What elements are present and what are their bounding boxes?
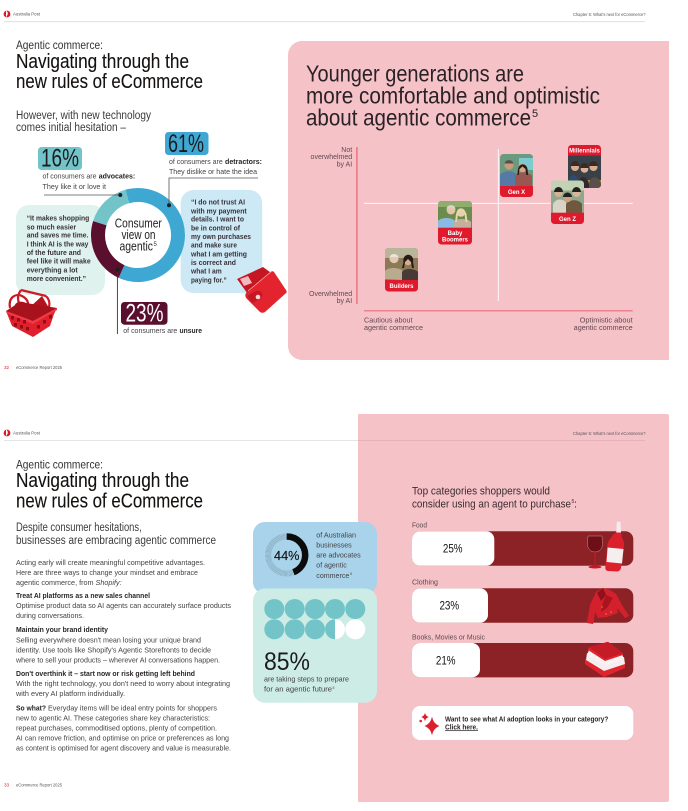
callout: call to action: Want to see what AI adoption looks in your category?: [445, 715, 608, 724]
panel: 85% preparing: 5: [332, 686, 334, 690]
callout bubble: detractor quote: [181, 190, 262, 293]
subheading page 2: [16, 522, 216, 547]
icon: red wallet: [237, 267, 287, 313]
donut chart: consumer view on agentic: view on: [122, 228, 156, 242]
title page 2: [16, 457, 203, 512]
callout bubble: advocate quote: [16, 205, 105, 295]
title page 2: Agentic commerce:: [16, 457, 103, 471]
donut chart: consumer view on agentic: agentic: [120, 240, 153, 254]
stat: 16% advocates: advocates:: [99, 172, 135, 181]
title page 2: Navigating through the: [16, 469, 189, 492]
header page 2: [4, 430, 646, 440]
title page 1: new rules of eCommerce: [16, 70, 203, 93]
stat: 16% advocates: of consumers are: [42, 172, 96, 181]
chart: generation quadrant: Gen X: [508, 190, 525, 196]
stat: 61% detractors: They dislike or hate the idea: [169, 167, 257, 176]
panel: 85% preparing: are taking steps to prepare: [264, 675, 349, 684]
card: Builders: [385, 248, 418, 292]
body text: Selling everywhere doesn't mean losing your unique brand: [16, 635, 201, 644]
subheading page 2: businesses are embracing agentic commerce: [16, 535, 216, 547]
body text: with every AI platform individually.: [15, 689, 125, 698]
y axis bottom label: by AI: [337, 298, 352, 305]
x axis right label: Optimistic about: [580, 318, 633, 324]
title page 1: Navigating through the: [16, 50, 189, 73]
header page 1: [4, 11, 646, 22]
callout bubble: advocate quote: “It makes shopping: [27, 214, 89, 223]
panel: 44% advocates: 5: [350, 572, 352, 576]
body text: Optimise product data so AI agents can accurately surface products: [16, 601, 231, 610]
stat: 23% unsure: [116, 268, 202, 335]
callout bubble: detractor quote: and make sure: [191, 241, 237, 250]
stat: 16% advocates: 16%: [41, 145, 79, 173]
heading: top categories: Top categories shoppers would: [412, 486, 550, 498]
stat: 16% advocates: They like it or love it: [42, 182, 106, 191]
panel: 44% advocates: of agentic: [316, 561, 347, 570]
stat: 61% detractors: detractors:: [225, 157, 262, 166]
panel: 44% advocates: businesses: [316, 540, 352, 550]
intro text: [16, 110, 151, 134]
y axis bottom label: Overwhelmed: [309, 291, 352, 298]
body text: agentic commerce, from Shopify:: [16, 578, 122, 587]
card: Gen Z: [551, 180, 584, 224]
bar: Food 25%: 25%: [443, 542, 463, 556]
x axis left label: [364, 318, 423, 332]
chart: generation quadrant: [309, 145, 633, 332]
bar: Food 25%: Food: [412, 522, 427, 529]
donut chart: consumer view on agentic: [89, 186, 187, 284]
icon: sparkles: [419, 712, 440, 736]
body text: [15, 558, 231, 752]
heading: younger generations: Younger generations are: [306, 61, 524, 87]
body text: as content is optimised for agent discovery and value is measurable.: [16, 743, 231, 752]
callout: call to action: [412, 706, 633, 740]
chart: generation quadrant: Millennials: [569, 149, 600, 155]
logo: Australia Post: [4, 11, 41, 17]
body text: With the right technology, you don't need to worry about integrating: [16, 679, 230, 688]
heading: younger generations: about agentic commerce: [306, 104, 531, 130]
icon array: 85% circles: [264, 599, 365, 639]
card: Baby Boomers: [438, 201, 472, 245]
stat: 61% detractors: 61%: [168, 130, 204, 158]
callout bubble: advocate quote: and saves me time.: [27, 231, 88, 240]
x axis right label: [574, 318, 633, 332]
stat: 61% detractors: of consumers are: [169, 157, 223, 166]
chapter label page 2: Chapter 6: What's next for eCommerce?: [573, 431, 646, 436]
icon: red leather jacket: [587, 588, 629, 624]
body text: during conversations.: [16, 611, 84, 620]
callout bubble: advocate quote: of the future and: [27, 248, 81, 257]
callout: call to action: Click here.: [445, 722, 478, 731]
panel: 44% advocates: [253, 522, 377, 594]
body text: Here are three ways to change your mindset and embrace: [16, 568, 198, 577]
subheading page 2: Despite consumer hesitations,: [16, 522, 142, 534]
heading: younger generations: [306, 61, 600, 130]
intro text: comes initial hesitation –: [16, 122, 127, 134]
intro text: However, with new technology: [16, 110, 151, 122]
bar: Books 21%: Books, Movies or Music: [412, 634, 485, 641]
footer page 1: 32: [4, 365, 10, 370]
body text: new to agentic AI. These categories share key characteristics:: [16, 713, 210, 722]
donut chart: consumer view on agentic: Consumer: [115, 217, 162, 231]
y axis top label: [311, 147, 352, 168]
bar: Books 21%: 21%: [436, 653, 456, 667]
body text: Maintain your brand identity: [16, 625, 108, 634]
callout bubble: advocate quote: more convenient.”: [27, 274, 86, 283]
body text: Don't overthink it – start now or risk getting left behind: [16, 669, 195, 678]
callout bubble: advocate quote: so much easier: [27, 222, 76, 231]
icon: stack of red books: [585, 642, 625, 677]
stat: 61% detractors: [165, 130, 262, 207]
bar: Clothing 23%: 23%: [439, 598, 459, 612]
callout bubble: detractor quote: be in control of: [191, 223, 241, 232]
chapter label: Chapter 6: What's next for eCommerce?: [573, 12, 646, 17]
bar: Clothing 23%: Clothing: [412, 580, 438, 587]
callout bubble: detractor quote: “I do not trust AI: [191, 198, 245, 207]
panel: 44% advocates: commerce: [316, 571, 349, 580]
logo: Australia Post page 2: [4, 430, 41, 436]
body text: identity. Use tools like Shopify's Agentic Storefronts to decide: [16, 645, 211, 654]
y axis top label: Not: [341, 147, 352, 154]
heading: top categories: [412, 486, 577, 510]
y axis top label: overwhelmed: [311, 154, 352, 161]
heading: top categories: 5: [572, 499, 574, 505]
panel: 85% preparing: for an agentic future: [264, 685, 332, 694]
card: Gen X: [500, 154, 533, 197]
stat: 23% unsure: unsure: [180, 326, 202, 335]
panel: pink right panel page 2: [358, 414, 669, 802]
callout bubble: detractor quote: paying for.”: [191, 275, 227, 284]
chart: generation quadrant: Baby: [448, 231, 463, 237]
callout bubble: detractor quote: what I am: [190, 267, 222, 276]
chart: generation quadrant: Builders: [389, 284, 414, 290]
icon: wine glass and bottle: [588, 522, 624, 572]
footer page 2: eCommerce Report 2025: [16, 782, 62, 788]
panel: 44% advocates: are advocates: [316, 551, 361, 560]
heading: top categories: :: [574, 498, 577, 510]
logo: Australia Post: Australia Post: [13, 12, 41, 17]
panel: pink right panel page 1: [288, 41, 669, 360]
heading: top categories: consider using an agent to purchase: [412, 498, 571, 510]
body text: repeat purchases, commoditised options, plenty of competition.: [16, 723, 217, 732]
title page 1: Agentic commerce:: [16, 38, 103, 52]
panel: 85% preparing: [253, 588, 377, 703]
chart: generation quadrant: Boomers: [442, 238, 469, 244]
x axis left label: Cautious about: [364, 318, 413, 324]
callout bubble: detractor quote: my own purchases: [191, 232, 251, 241]
stat: 23% unsure: of consumers are: [123, 326, 177, 335]
y axis bottom label: [309, 291, 352, 305]
gauge: 44%: 44%: [274, 548, 300, 563]
stat: 23% unsure: 23%: [126, 300, 164, 328]
callout bubble: advocate quote: feel like it will make: [27, 257, 91, 266]
body text: AI can remove friction, and optimise on price or preferences as long: [16, 733, 229, 742]
bar: Food 25%: [412, 522, 633, 572]
body text: Treat AI platforms as a new sales channel: [16, 591, 150, 600]
footer page 2: 33: [4, 782, 10, 788]
donut chart: consumer view on agentic: 5: [154, 242, 158, 248]
body text: where to sell your products – wherever AI conversations happen.: [15, 655, 220, 664]
bar: Books 21%: [412, 634, 633, 677]
y axis top label: by AI: [337, 161, 352, 168]
chart: generation quadrant: Gen Z: [559, 217, 576, 223]
x axis right label: agentic commerce: [574, 325, 633, 332]
icon: red shopping basket: [6, 290, 57, 337]
title page 1: [16, 38, 203, 93]
body text: Everyday items will be ideal entry points for shoppers: [48, 703, 217, 712]
callout bubble: detractor quote: what I am getting: [190, 249, 247, 258]
bar: Clothing 23%: [412, 580, 633, 624]
callout bubble: advocate quote: everything a lot: [27, 265, 78, 274]
panel: 44% advocates: of Australian: [316, 530, 356, 539]
body text: Acting early will create meaningful competitive advantages.: [16, 558, 205, 567]
callout bubble: detractor quote: details. I want to: [191, 215, 245, 224]
callout bubble: detractor quote: is correct and: [191, 258, 236, 267]
stat: 16% advocates: [38, 145, 135, 197]
body text: So what?: [16, 703, 46, 712]
x axis left label: agentic commerce: [364, 325, 423, 332]
callout bubble: advocate quote: I think AI is the way: [27, 239, 88, 248]
logo: Australia Post page 2: Australia Post: [13, 431, 41, 436]
title page 2: new rules of eCommerce: [16, 489, 203, 512]
heading: younger generations: more comfortable and optimistic: [306, 82, 600, 108]
panel: 85% preparing: 85%: [264, 648, 310, 676]
heading: younger generations: 5: [532, 108, 538, 120]
card: Millennials: [568, 145, 601, 188]
callout bubble: detractor quote: with my payment: [190, 206, 247, 215]
footer page 1: eCommerce Report 2025: [16, 365, 62, 370]
